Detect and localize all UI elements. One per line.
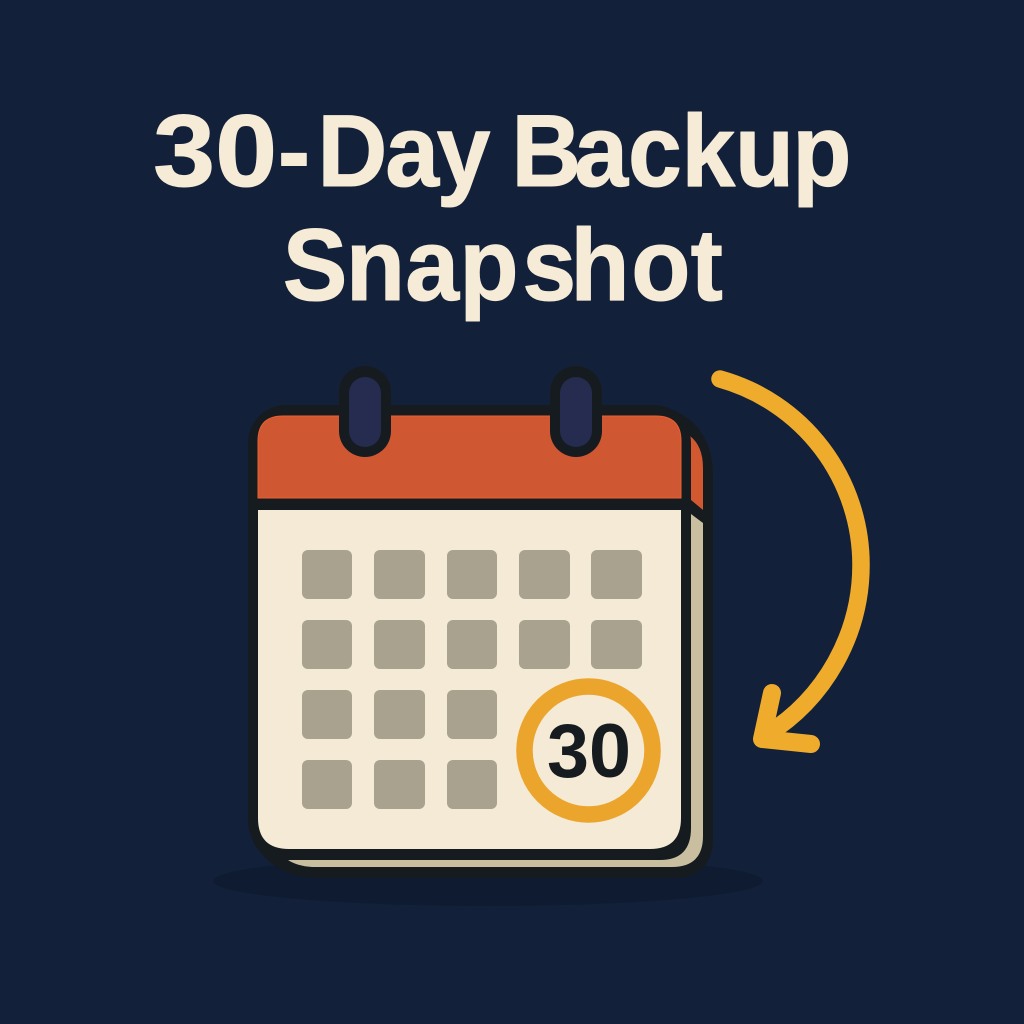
calendar icon (248, 366, 713, 878)
highlight ring (524, 686, 652, 814)
title line 2: Snapshot (283, 209, 723, 323)
arrow head (762, 693, 811, 744)
ring inner (560, 377, 592, 447)
calendar page (258, 510, 681, 849)
day number: 30 (547, 709, 631, 794)
calendar header (258, 416, 681, 498)
calendar shadow (213, 856, 763, 906)
day grid (302, 550, 642, 809)
ring outline (550, 366, 602, 457)
arrow shaft (720, 379, 861, 735)
back pages (248, 405, 713, 878)
title (153, 94, 851, 323)
back sheet outline (248, 405, 713, 878)
right binder ring (550, 366, 602, 457)
left binder ring (339, 366, 391, 457)
back sheet red edge (690, 436, 703, 510)
front card outline (248, 405, 691, 859)
title line 1: remainder: -Day Backup (278, 95, 851, 209)
title line 1: number: 30 (153, 94, 277, 208)
curved arrow (720, 379, 861, 744)
back sheet paper edge (288, 514, 703, 867)
ring outline (339, 366, 391, 457)
day 30 highlight (524, 686, 652, 814)
ring inner (349, 377, 381, 447)
